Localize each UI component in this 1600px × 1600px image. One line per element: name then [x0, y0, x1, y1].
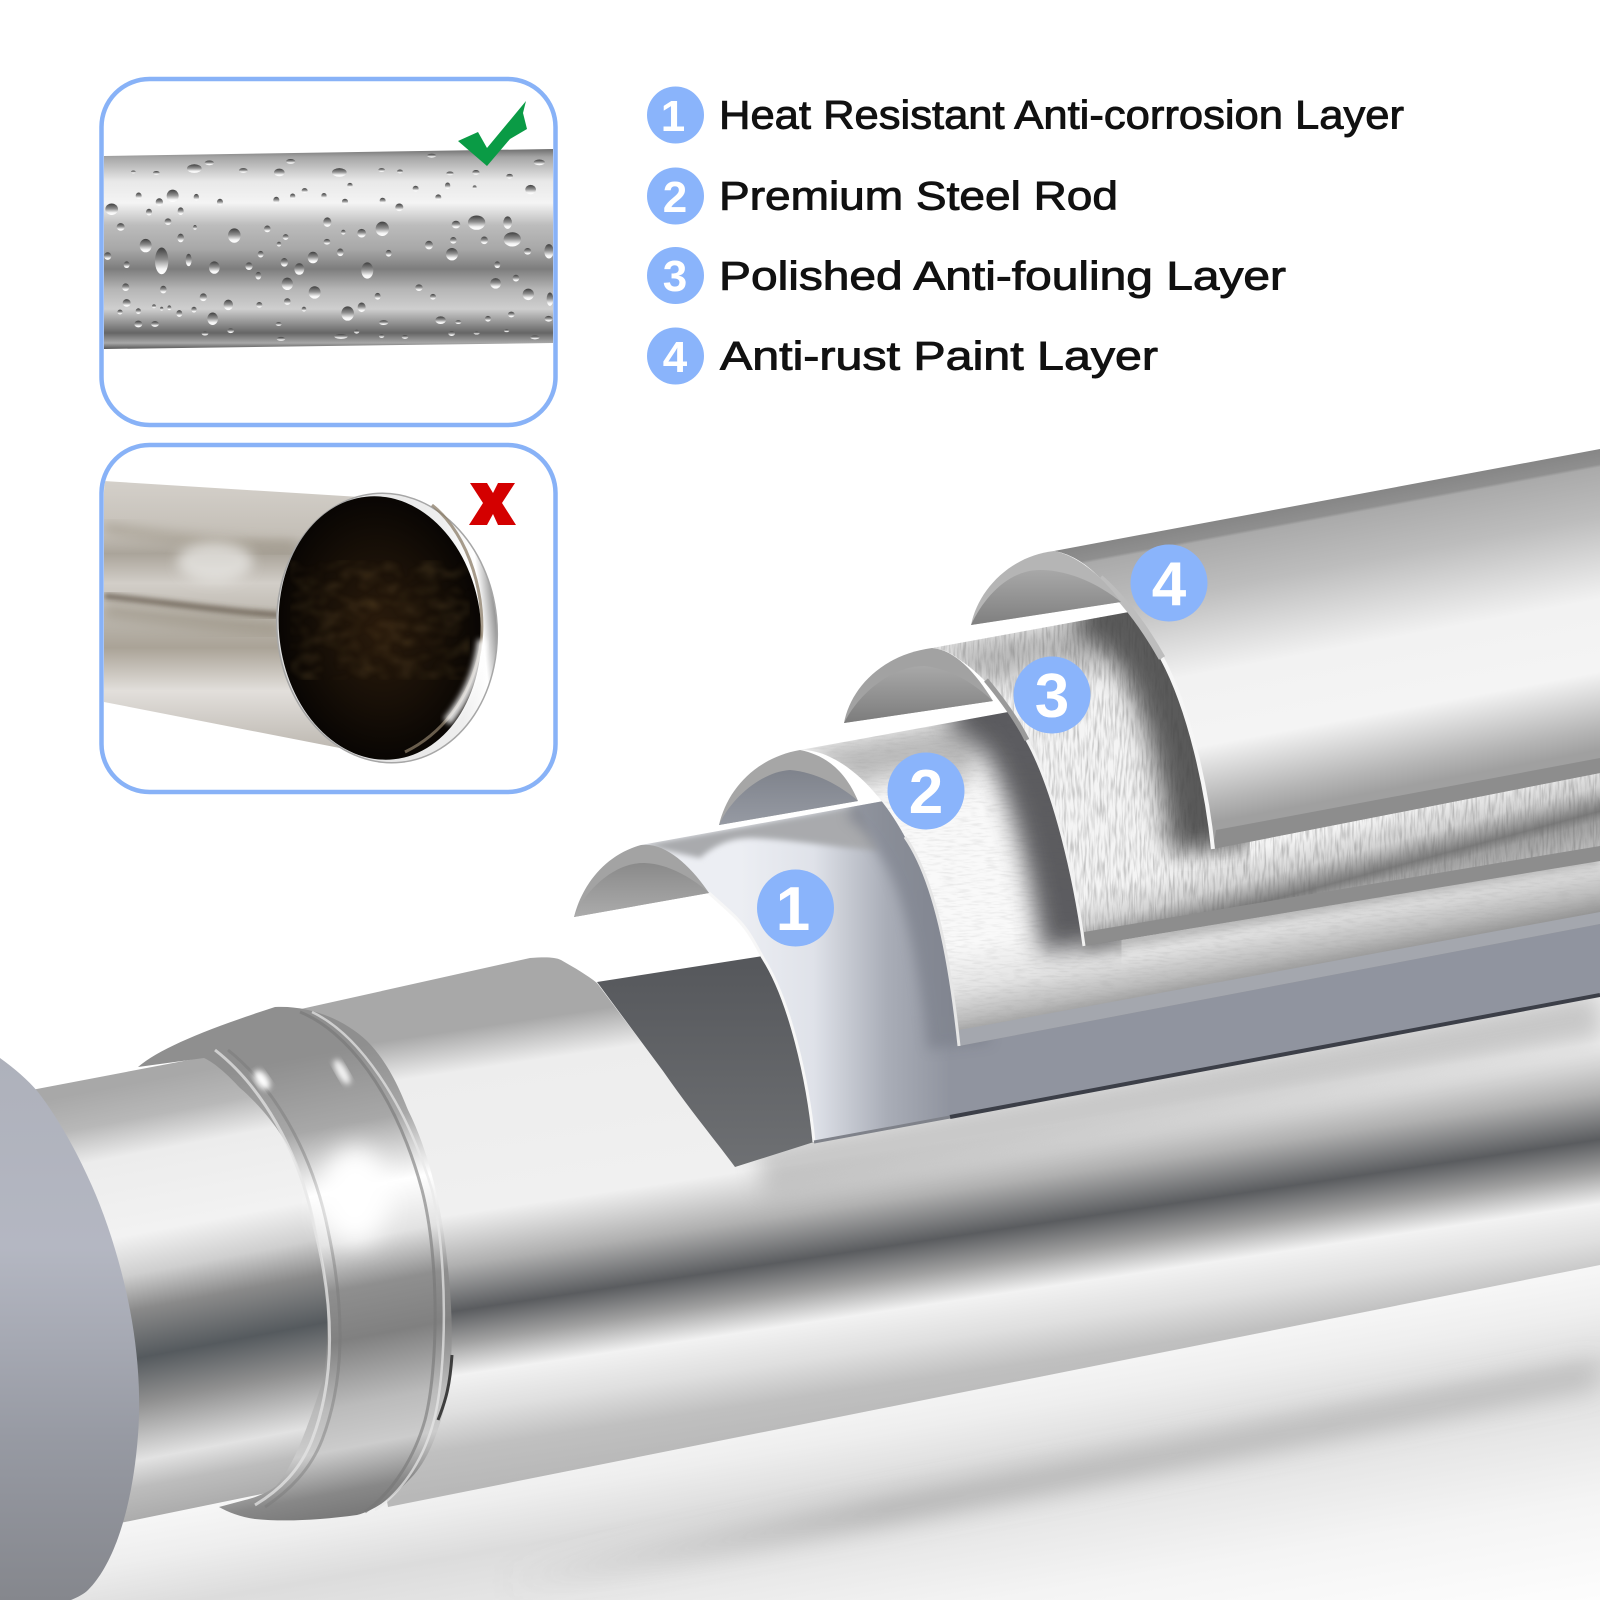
- collar ring: [138, 1007, 452, 1520]
- badge 3: [1014, 656, 1090, 734]
- badge 4: [1130, 544, 1208, 622]
- inner core channel: [597, 956, 814, 1167]
- badge 4: 4: [1152, 550, 1187, 619]
- legend item 3: Polished Anti-fouling Layer: [719, 254, 1286, 298]
- layer 3: polished anti-fouling layer: [844, 612, 1600, 946]
- legend item 3: 3: [663, 252, 687, 301]
- badge 3: 3: [1035, 662, 1069, 731]
- badge 1: [757, 870, 834, 946]
- main rod: [301, 957, 1600, 1507]
- legend item 2: [647, 168, 1118, 224]
- pipe mouth: [276, 492, 498, 764]
- legend item 2: Premium Steel Rod: [719, 174, 1118, 218]
- legend item 4: Anti-rust Paint Layer: [720, 334, 1158, 378]
- rod segment left of collar: [0, 1033, 330, 1545]
- legend item 1: 1: [661, 92, 685, 141]
- rusty pipe body: [104, 481, 360, 750]
- badge 2: [888, 752, 964, 830]
- layer 2: premium steel rod: [719, 712, 1600, 1046]
- icon: red cross: [469, 483, 516, 525]
- legend item 4: 4: [663, 333, 688, 382]
- legend item 3: [647, 247, 1286, 304]
- layer 4: anti-rust paint layer: [971, 449, 1600, 849]
- floor reflection: [0, 1230, 1600, 1600]
- badge 2: 2: [909, 758, 943, 827]
- panel: water-repellent coated pipe: [102, 79, 556, 425]
- layer 1: heat resistant anti-corrosion layer: [574, 801, 1600, 1144]
- coated pipe with water droplets: [104, 149, 554, 349]
- legend item 1: Heat Resistant Anti-corrosion Layer: [719, 94, 1404, 138]
- legend item 1: [647, 86, 1404, 144]
- legend item 2: 2: [663, 173, 687, 222]
- legend item 4: [647, 328, 1158, 384]
- panel: rusty uncoated pipe: [102, 445, 556, 792]
- icon: green check mark: [458, 101, 527, 166]
- badge 1: 1: [776, 875, 810, 944]
- end cap: [0, 1058, 139, 1600]
- panel frame bottom: [102, 445, 556, 792]
- legend list: [647, 86, 1404, 384]
- panel frame top: [102, 79, 556, 425]
